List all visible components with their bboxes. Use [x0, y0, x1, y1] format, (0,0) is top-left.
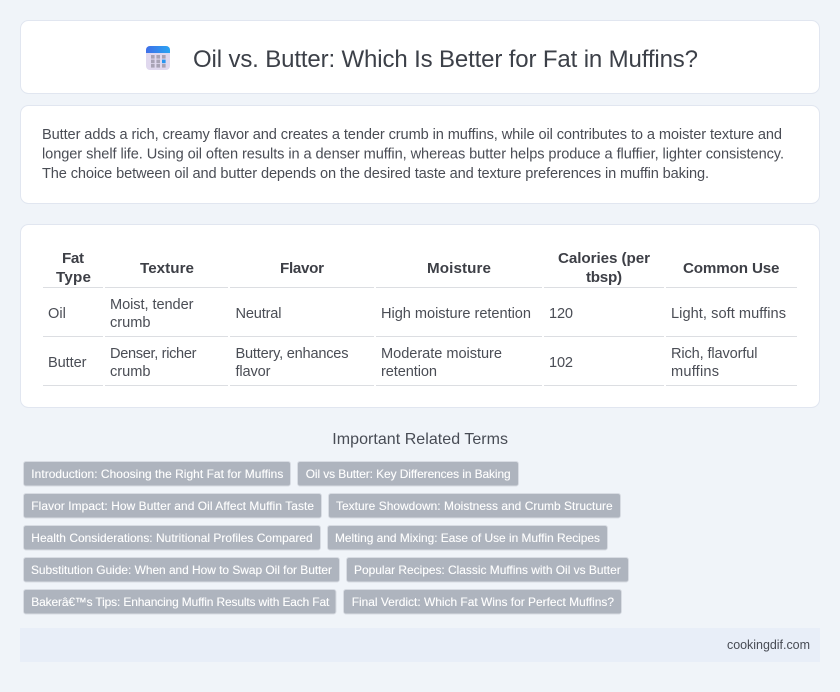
text block: intro paragraph — [42, 127, 784, 182]
table row: butter: retention — [381, 364, 437, 380]
tag: key differences: Oil vs Butter: Key Differences in Baking — [306, 467, 511, 481]
tag: popular recipes — [346, 558, 628, 582]
tag: introduction: Introduction: Choosing the Right Fat for Muffins — [31, 467, 283, 481]
tag: flavor impact — [24, 494, 322, 518]
tag: final verdict: Final Verdict: Which Fat Wins for Perfect Muffins? — [352, 595, 614, 609]
footer: cookingdif.com — [727, 638, 810, 652]
table row: butter — [43, 346, 797, 386]
tag: substitution guide: Substitution Guide: When and How to Swap Oil for Butter — [31, 563, 332, 577]
tag: melting and mixing — [328, 526, 608, 550]
icon: calendar — [146, 46, 170, 70]
table row: oil: Neutral — [236, 306, 282, 322]
tag: flavor impact: Flavor Impact: How Butter and Oil Affect Muffin Taste — [31, 499, 314, 513]
text block: intro paragraph: The choice between oil and butter depends on the desired taste and texture preferences in muffin baking. — [42, 166, 709, 182]
table row: oil — [43, 297, 797, 337]
table row: oil: High moisture retention — [381, 306, 531, 322]
heading: important related terms: Important Related Terms — [332, 431, 508, 448]
table row: butter: crumb — [110, 364, 150, 380]
table row: butter: flavor — [236, 364, 271, 380]
tag: substitution guide — [24, 558, 340, 582]
table row: butter: Butter — [48, 355, 87, 371]
tag: key differences — [298, 462, 518, 486]
table header row: Flavor — [280, 260, 324, 277]
title: Oil vs. Butter: Which Is Better for Fat in Muffins? — [193, 46, 698, 73]
table row: oil: Moist, tender — [110, 297, 194, 313]
tag: final verdict — [344, 590, 622, 614]
table row: oil: 120 — [549, 306, 573, 322]
tag: introduction — [24, 462, 290, 486]
tag: texture showdown — [328, 494, 620, 518]
table row: oil: Oil — [48, 306, 66, 322]
table row: butter: Moderate moisture — [381, 346, 502, 362]
table row: butter: Buttery, enhances — [236, 346, 348, 362]
panel: header — [20, 20, 820, 94]
table row: oil: Light, soft muffins — [671, 306, 786, 322]
table header row: Common Use — [683, 260, 780, 277]
panel: related term tags — [24, 462, 628, 614]
table row: butter: muffins — [671, 364, 719, 380]
footer — [20, 628, 820, 662]
tag: baker's tips: Bakerâ€™s Tips: Enhancing Muffin Results with Each Fat — [31, 595, 330, 609]
tag: melting and mixing: Melting and Mixing: Ease of Use in Muffin Recipes — [335, 531, 600, 545]
table header row — [43, 250, 797, 288]
panel: intro text — [20, 106, 820, 204]
table header row: Texture — [140, 260, 194, 277]
table row: butter: Rich, flavorful — [671, 346, 758, 362]
tag: texture showdown: Texture Showdown: Moistness and Crumb Structure — [336, 499, 613, 513]
table row: oil: crumb — [110, 315, 150, 331]
tag: baker's tips — [24, 590, 336, 614]
table header row: Calories (per — [558, 250, 650, 267]
text block: intro paragraph: Butter adds a rich, creamy flavor and creates a tender crumb in muffins, while oil contributes to a moister texture and — [42, 127, 782, 143]
table row: butter: 102 — [549, 355, 573, 371]
table row: butter: Denser, richer — [110, 346, 197, 362]
table header row: Fat — [62, 250, 84, 267]
table header row: Moisture — [427, 260, 491, 277]
tag: health considerations: Health Considerations: Nutritional Profiles Compared — [31, 531, 313, 545]
table header row: Type — [56, 269, 91, 286]
table header row: tbsp) — [586, 269, 622, 286]
tag: health considerations — [24, 526, 320, 550]
tag: popular recipes: Popular Recipes: Classic Muffins with Oil vs Butter — [354, 563, 621, 577]
text block: intro paragraph: longer shelf life. Using oil often results in a denser muffin, whereas butter helps produce a fluffier, lighter consistency. — [42, 146, 784, 162]
panel: comparison table — [20, 224, 820, 408]
